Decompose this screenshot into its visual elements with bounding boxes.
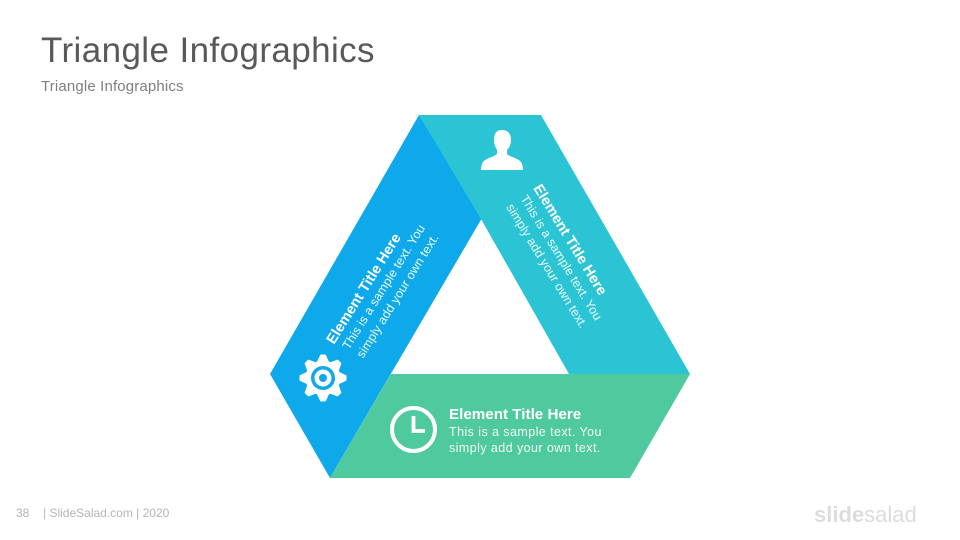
page number: 38 [16, 506, 29, 520]
panel: blue band [270, 115, 482, 478]
panel: teal band [419, 115, 690, 374]
teal band text [502, 182, 620, 332]
teal band text: This is a sample text. You [517, 193, 605, 323]
blue band text [324, 213, 442, 364]
green band text: Element Title Here [449, 406, 581, 423]
icon: person [481, 130, 523, 170]
logo: slidesalad: slidesalad [814, 502, 917, 527]
subtitle: Triangle Infographics [41, 78, 184, 95]
blue band text: Element Title Here [324, 231, 405, 347]
blue band text: This is a sample text. You [340, 222, 428, 352]
footer text: | SlideSalad.com | 2020 [43, 506, 169, 520]
green band text: This is a sample text. You [449, 425, 602, 439]
blue band text: simply add your own text. [354, 231, 442, 361]
icon: clock [392, 408, 435, 451]
teal band text: Element Title Here [530, 182, 610, 298]
green band text: simply add your own text. [449, 441, 601, 455]
teal band text: simply add your own text. [503, 201, 590, 331]
icon: gear [300, 356, 346, 400]
title: Triangle Infographics [41, 31, 375, 70]
green band text [449, 406, 602, 455]
panel: green band [330, 374, 690, 478]
